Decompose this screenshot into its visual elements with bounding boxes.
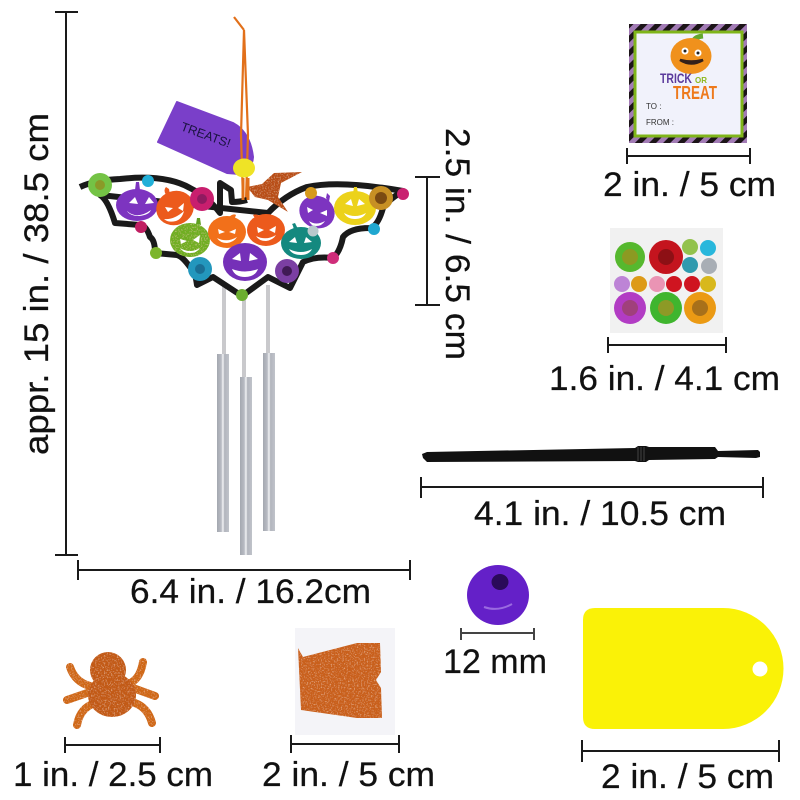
dimension: yellow tag (582, 740, 779, 796)
card title: OR (695, 76, 707, 85)
pumpkins (116, 182, 376, 281)
dimension: glitter bag: 2 in. / 5 cm (262, 756, 435, 794)
dimension: brush (421, 477, 763, 533)
gem sticker sheet (610, 228, 723, 333)
card fields: TO : (646, 102, 661, 111)
dimension: card: 2 in. / 5 cm (603, 166, 776, 204)
dimension: stickers: 1.6 in. / 4.1 cm (549, 360, 780, 398)
card title: TRICK (660, 70, 692, 86)
dimension: brush: 4.1 in. / 10.5 cm (474, 495, 726, 533)
dimension: bat width: 6.4 in. / 16.2cm (130, 573, 371, 611)
dimension: bat height (415, 128, 476, 360)
dimension: stickers (549, 337, 780, 398)
cord end (243, 178, 248, 200)
purple bead (467, 565, 529, 625)
hanging cord (234, 17, 248, 200)
dimension: bat height: 2.5 in. / 6.5 cm (438, 128, 476, 360)
purple treats tag: TREATS! (179, 120, 232, 151)
gift card (629, 24, 747, 143)
dimension: overall height: appr. 15 in. / 38.5 cm (18, 113, 56, 455)
card title (660, 70, 717, 103)
bat frame (80, 178, 403, 296)
purple treats tag (158, 102, 253, 174)
pumpkin faces (127, 197, 366, 277)
gems on bat (88, 173, 409, 301)
yellow bead (233, 158, 255, 178)
card fields (646, 102, 674, 127)
dimension: spider: 1 in. / 2.5 cm (13, 756, 213, 794)
glitter spider (67, 652, 155, 725)
dimension: glitter bag (262, 735, 435, 794)
glitter bag (295, 628, 395, 735)
card pumpkin (670, 36, 712, 74)
witch hat (247, 172, 302, 212)
card title: TREAT (673, 83, 717, 103)
card fields: FROM : (646, 118, 674, 127)
dimension: spider (13, 737, 213, 794)
brush (422, 446, 760, 462)
dimension: card (603, 148, 776, 204)
dimension: bead: 12 mm (443, 643, 547, 681)
chimes (217, 285, 275, 555)
dimension: overall height (18, 12, 78, 555)
dimension: yellow tag: 2 in. / 5 cm (601, 758, 774, 796)
dimension: bat width (78, 560, 410, 611)
yellow blank tag (583, 608, 784, 729)
